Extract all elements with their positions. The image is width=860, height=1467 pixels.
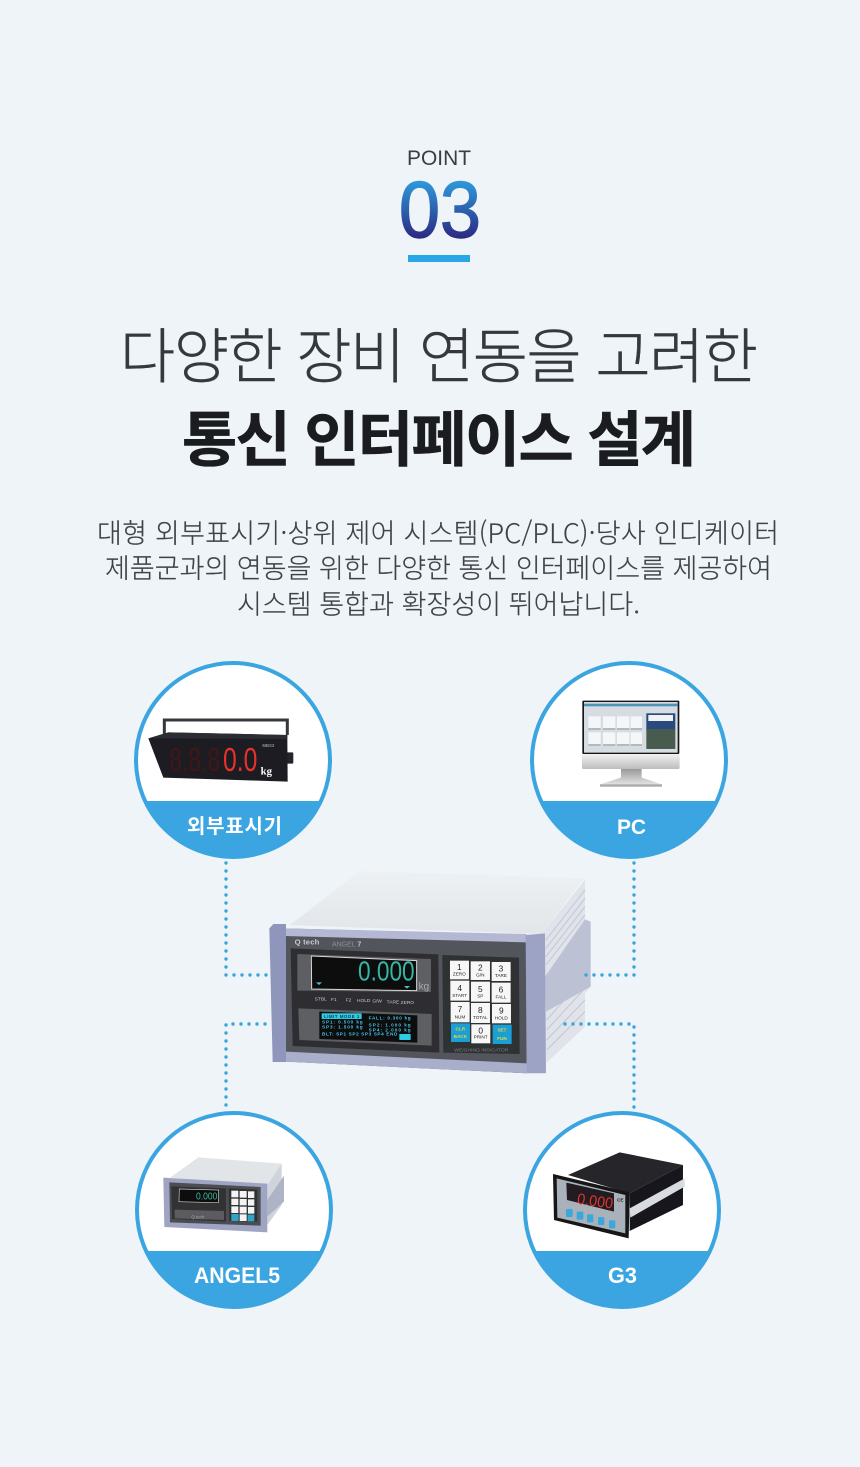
main device: ANGEL7 indicator: WEIGHING INDICATOR: [454, 1048, 509, 1054]
upper display: [297, 954, 431, 992]
icon: external display device: 0.0: [223, 742, 257, 779]
main device: ANGEL7 indicator: FALL: [496, 994, 507, 999]
main device: ANGEL7 indicator: SP2: 1.000 kg: [369, 1022, 411, 1027]
left bracket: [269, 924, 286, 1062]
main device: ANGEL7 indicator: G/N: [476, 972, 484, 977]
main device: ANGEL7 indicator: NUM: [455, 1014, 465, 1019]
top face: [290, 871, 584, 934]
main device: ANGEL7 indicator: HOLD: [495, 1016, 508, 1021]
main device: ANGEL7 indicator: LIMIT MODE 1: [324, 1014, 360, 1019]
icon: external display device: [148, 720, 293, 782]
status labels: HOLD: [357, 998, 371, 1004]
main device: ANGEL7 indicator: 0.000: [358, 956, 415, 987]
main device: ANGEL7 indicator: 6: [499, 985, 504, 995]
node: ANGEL5: [130, 1113, 340, 1313]
icon: ANGEL5 indicator: [163, 1157, 284, 1232]
point label: POINT: [407, 147, 471, 170]
main device: ANGEL7 indicator: [269, 871, 591, 1073]
status labels: ZERO: [401, 1000, 414, 1006]
title: [120, 309, 758, 479]
main device: ANGEL7 indicator: 5: [478, 984, 483, 994]
description text: 대형 외부표시기·상위 제어 시스템(PC/PLC)·당사 인디케이터: [97, 512, 779, 551]
main device: ANGEL7 indicator: ZERO: [453, 972, 466, 977]
main device: ANGEL7 indicator: kg: [419, 981, 429, 992]
main device: ANGEL7 indicator: TARE: [495, 973, 507, 978]
label band: ANGEL5: [148, 1251, 320, 1305]
main device: ANGEL7 indicator: CLR: [456, 1026, 466, 1031]
status labels: F1: [331, 997, 337, 1003]
dotted connectors: [226, 863, 634, 1107]
status labels: TARE: [387, 999, 400, 1005]
main device: ANGEL7 indicator: TOTAL: [473, 1015, 488, 1020]
node: PC: [525, 663, 735, 863]
main device: ANGEL7 indicator: FALL: 0.300 kg: [369, 1016, 411, 1021]
label band: PC: [543, 801, 715, 855]
title: 다양한 장비 연동을 고려한: [120, 309, 758, 396]
label band: G3: [536, 1251, 708, 1305]
main device: ANGEL7 indicator: 2: [478, 963, 483, 973]
lower LCD: [298, 1008, 432, 1046]
icon: G3 indicator: [553, 1152, 685, 1238]
accent bar: [408, 255, 470, 262]
main device: ANGEL7 indicator: SP4: 2.000 kg: [369, 1027, 411, 1032]
front faceplate: [283, 928, 527, 1073]
node: G3: [518, 1113, 728, 1313]
icon: G3 indicator: CE: [617, 1198, 623, 1203]
node: external display: [130, 663, 340, 863]
label: ANGEL5: ANGEL5: [194, 1263, 280, 1288]
label: external display: 외부표시기: [187, 810, 282, 839]
description text: 시스템 통합과 확장성이 뛰어납니다.: [237, 583, 640, 622]
label: G3: G3: [608, 1263, 637, 1288]
icon: ANGEL5 indicator: Q tech: [191, 1214, 205, 1219]
main device: ANGEL7 indicator: SET: [497, 1028, 507, 1033]
main device: ANGEL7 indicator: 0: [478, 1025, 483, 1035]
icon: ANGEL5 indicator: 0.000: [196, 1192, 218, 1203]
description text: [97, 512, 779, 622]
icon: external display device: 8.8.8: [169, 742, 220, 779]
main device: ANGEL7 indicator: BACK: [454, 1034, 468, 1039]
description text: 제품군과의 연동을 위한 다양한 통신 인터페이스를 제공하여: [105, 547, 772, 586]
main device: ANGEL7 indicator: START: [452, 993, 467, 998]
brand: Q tech: [295, 938, 320, 947]
icon: external display device: kg: [261, 766, 273, 777]
main device: ANGEL7 indicator: ANGEL 7: [332, 941, 361, 948]
main device: ANGEL7 indicator: FUN: [497, 1036, 507, 1041]
main device: ANGEL7 indicator: SP: [477, 994, 483, 999]
status labels: STBL: [315, 996, 327, 1002]
right bracket: [526, 933, 546, 1073]
label: PC: PC: [617, 816, 646, 839]
label band: external display: [147, 801, 319, 855]
status labels: G/W: [372, 999, 382, 1005]
icon: monitor: [582, 701, 680, 787]
main device: ANGEL7 indicator: SP3: 1.500 kg: [322, 1025, 363, 1030]
main device: ANGEL7 indicator: 9: [499, 1006, 504, 1016]
keypad: [442, 955, 520, 1054]
main device: ANGEL7 indicator: 7: [458, 1004, 463, 1014]
point number 03: 03: [399, 165, 481, 254]
status labels: F2: [346, 998, 352, 1004]
title: 통신 인터페이스 설계: [182, 392, 696, 479]
status labels: [315, 996, 414, 1006]
main device: ANGEL7 indicator: PRINT: [474, 1035, 488, 1040]
main device: ANGEL7 indicator: 3: [499, 963, 504, 973]
icon: G3 indicator: 0.000: [576, 1191, 614, 1213]
display panel: [291, 948, 439, 1053]
icon: external display device: MBS3: [262, 743, 275, 748]
main device: ANGEL7 indicator: 4: [457, 983, 462, 993]
main device: ANGEL7 indicator: SP1: 0.500 kg: [322, 1020, 363, 1025]
main device: ANGEL7 indicator: 8: [478, 1005, 483, 1015]
main device: ANGEL7 indicator: BLT: SP1 SP2 SP3 SP4 END: [322, 1031, 398, 1036]
main device: ANGEL7 indicator: 1: [457, 962, 462, 972]
side rail: [545, 919, 591, 1012]
side with rails: [542, 880, 591, 1063]
